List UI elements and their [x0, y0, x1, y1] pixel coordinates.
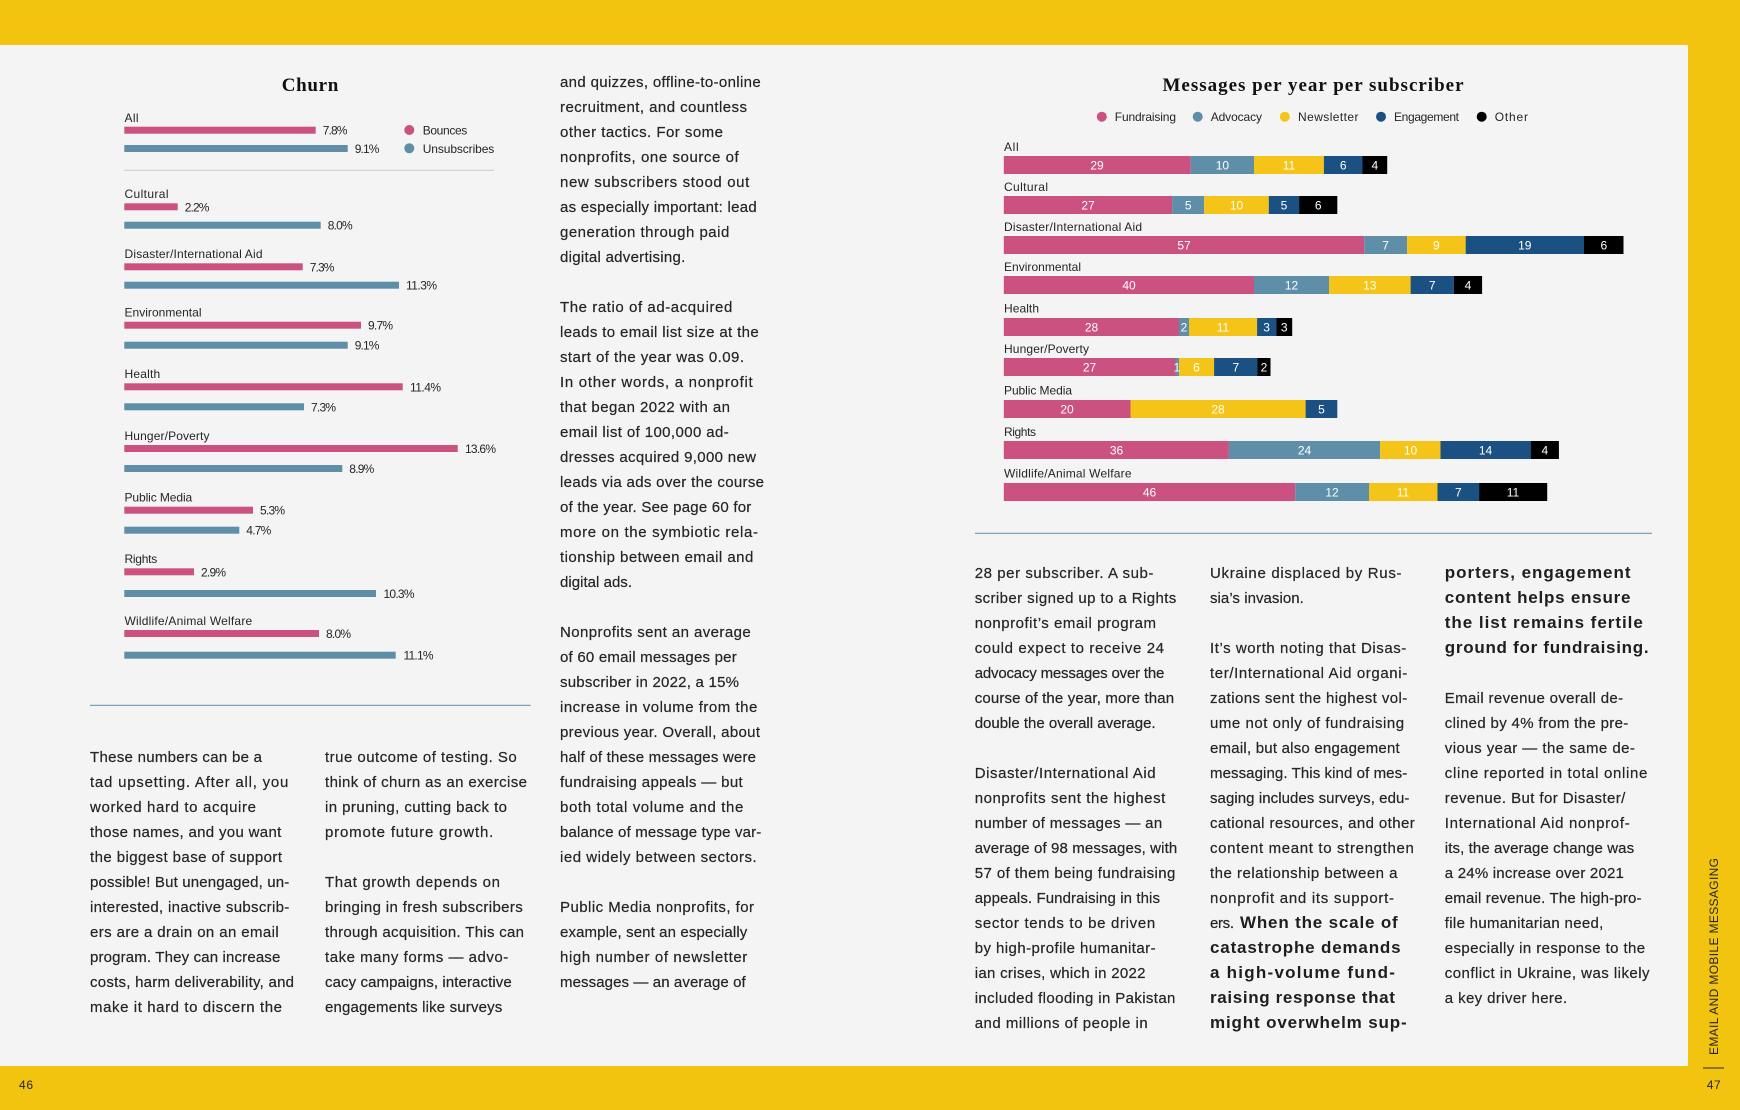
stacked row: Wildlife/Animal Welfare	[1004, 466, 1547, 501]
panel: messages per year stacked bar chart	[1004, 75, 1624, 501]
text block: left column three: subscriber in 2022, a 15%	[560, 674, 739, 691]
text block: left column three: fundraising appeals — but	[560, 774, 744, 791]
text block: right column one: number of messages — an	[975, 815, 1162, 832]
text block: right column one: 57 of them being fundraising	[975, 865, 1175, 882]
churn row: Disaster/International Aid: Disaster/International Aid	[124, 247, 262, 261]
churn legend: Unsubscribes	[423, 142, 494, 156]
bottom yellow band	[0, 1066, 1740, 1110]
churn legend: Bounces	[423, 124, 467, 138]
text block: right column two: ume not only of fundraising	[1210, 715, 1404, 732]
text block: left column one: make it hard to discern the	[90, 999, 282, 1016]
text block: right column three: Email revenue overall de-	[1445, 690, 1623, 707]
text block: left column two: take many forms — advo-	[325, 949, 508, 966]
stacked row: Hunger/Poverty	[1004, 342, 1270, 376]
text block: left column two: That growth depends on	[325, 874, 500, 891]
stacked row: Disaster/International Aid: 7	[1382, 238, 1389, 252]
text block: right column three: especially in response to the	[1445, 940, 1645, 957]
text block: right column two	[1210, 565, 1415, 1032]
stacked row: Public Media: Public Media	[1004, 384, 1072, 398]
text block: left column one: those names, and you want	[90, 824, 282, 841]
stacked row: Cultural: 5	[1185, 198, 1192, 212]
churn row: Cultural: 2.2%	[185, 200, 210, 214]
text block: left column three: example, sent an especially	[560, 924, 748, 941]
stacked row: Wildlife/Animal Welfare: 7	[1455, 486, 1462, 500]
text block: right column three: a 24% increase over 2021	[1445, 865, 1624, 882]
stacked row: Health: 3	[1263, 320, 1270, 334]
stacked row: Cultural: 10	[1230, 198, 1243, 212]
text block: right column three: International Aid nonprof-	[1445, 815, 1630, 832]
stacked row: Environmental	[1004, 260, 1482, 294]
text block: left column one: the biggest base of support	[90, 849, 283, 866]
churn row: Rights: Rights	[124, 552, 157, 566]
text block: right column two: saging includes surveys, edu-	[1210, 790, 1409, 807]
text block: right column three: revenue. But for Disaster/	[1445, 790, 1626, 807]
text block: right column three: email revenue. The high-pro-	[1445, 890, 1642, 907]
text block: left column one: possible! But unengaged, un-	[90, 874, 289, 891]
stacked row: Cultural: 6	[1315, 198, 1322, 212]
text block: right column one: nonprofits sent the highest	[975, 790, 1166, 807]
text block: right column one: sector tends to be driven	[975, 915, 1155, 932]
text block: right column three: conflict in Ukraine, was likely	[1445, 965, 1650, 982]
stacked row: Rights: 10	[1404, 444, 1417, 458]
text block: right column one: and millions of people in	[975, 1015, 1148, 1032]
stacked row: Wildlife/Animal Welfare: Wildlife/Animal Welfare	[1004, 466, 1132, 480]
text block: left column two: engagements like surveys	[325, 999, 502, 1016]
stacked row: Health: 11	[1217, 320, 1230, 334]
churn row: Disaster/International Aid: 11.3%	[406, 279, 437, 293]
text block: right column one: course of the year, more than	[975, 690, 1174, 707]
churn row: Cultural	[124, 187, 353, 233]
churn row: Health	[124, 367, 441, 414]
text block: right column three: its, the average change was	[1445, 840, 1634, 857]
churn row: Health: Health	[124, 367, 160, 381]
text block: left column two: through acquisition. This can	[325, 924, 524, 941]
text block: left column three: balance of message type var-	[560, 824, 761, 841]
text block: left column three: previous year. Overall, about	[560, 724, 761, 741]
text block: right column two: might overwhelm sup-	[1210, 1013, 1407, 1032]
churn row: All	[124, 111, 380, 156]
text block: right column two: When the scale of	[1240, 913, 1398, 932]
stacked row: Rights: Rights	[1004, 425, 1036, 439]
stacked row: All: 4	[1371, 158, 1378, 172]
stacked row: Public Media: 28	[1211, 402, 1225, 416]
text block: right column three: file humanitarian need,	[1445, 915, 1603, 932]
stacked row: Rights: 24	[1298, 444, 1311, 458]
text block: left column two: true outcome of testing. So	[325, 749, 517, 766]
panel: churn chart	[124, 75, 496, 663]
text block: left column three: The ratio of ad-acquired	[560, 299, 732, 316]
text block: left column three: email list of 100,000 ad-	[560, 424, 729, 441]
text block: left column two: in pruning, cutting back to	[325, 799, 507, 816]
churn row: Hunger/Poverty: 8.9%	[349, 462, 375, 476]
text block: left column three: both total volume and the	[560, 799, 743, 816]
text block: right column two: nonprofit and its support-	[1210, 890, 1394, 907]
churn row: All: 7.8%	[323, 124, 348, 138]
text block: left column three: generation through paid	[560, 224, 729, 241]
text block: right column two: a high-volume fund-	[1210, 963, 1395, 982]
text block: left column two: bringing in fresh subscribers	[325, 899, 523, 916]
text block: right column one: 28 per subscriber. A sub-	[975, 565, 1153, 582]
churn row: Wildlife/Animal Welfare: 8.0%	[326, 627, 351, 641]
text block: left column three: as especially important: lead	[560, 199, 757, 216]
stacked row: Disaster/International Aid	[1004, 220, 1624, 254]
text block: left column one: costs, harm deliverability, and	[90, 974, 294, 991]
stacked row: Hunger/Poverty: 6	[1193, 360, 1200, 374]
churn row: Rights: 2.9%	[201, 565, 226, 579]
text block: left column three: recruitment, and countless	[560, 99, 747, 116]
churn row: Wildlife/Animal Welfare	[124, 614, 434, 663]
text block: left column three	[560, 74, 764, 991]
churn row: Environmental: 9.7%	[368, 319, 393, 333]
text block: right column one	[975, 565, 1177, 1032]
messages legend	[1097, 110, 1528, 124]
text block: left column three: dresses acquired 9,000 new	[560, 449, 756, 466]
text block: left column three: and quizzes, offline-to-online	[560, 74, 761, 91]
text block: right column three: ground for fundraising.	[1445, 638, 1649, 657]
stacked row: Disaster/International Aid: 57	[1177, 238, 1191, 252]
stacked row: Hunger/Poverty: 7	[1232, 360, 1239, 374]
text block: right column three	[1445, 563, 1650, 1007]
text block: left column three: of 60 email messages per	[560, 649, 737, 666]
text block: right column two: raising response that	[1210, 988, 1395, 1007]
text block: right column three: cline reported in total online	[1445, 765, 1647, 782]
stacked row: Environmental: 13	[1363, 278, 1377, 292]
text block: left column three: more on the symbiotic rela-	[560, 524, 758, 541]
text block: right column two: It’s worth noting that Disas-	[1210, 640, 1406, 657]
churn row: Environmental: Environmental	[124, 306, 202, 320]
stacked row: Cultural: 27	[1081, 198, 1095, 212]
text block: left column one: program. They can increase	[90, 949, 280, 966]
stacked row: Health: 3	[1281, 320, 1288, 334]
churn row: Rights: 10.3%	[384, 587, 415, 601]
stacked row: All: 11	[1283, 158, 1296, 172]
text block: left column three: ied widely between sectors.	[560, 849, 757, 866]
churn row: Environmental	[124, 306, 393, 353]
churn row: Public Media: 5.3%	[260, 504, 285, 518]
messages legend: Newsletter	[1298, 110, 1358, 124]
churn row: Disaster/International Aid	[124, 247, 437, 293]
stacked row: Health: 2	[1181, 320, 1188, 334]
text block: right column one: could expect to receive 24	[975, 640, 1164, 657]
text block: left column three: tionship between email and	[560, 549, 753, 566]
text block: left column three: increase in volume from the	[560, 699, 757, 716]
top yellow band	[0, 0, 1740, 45]
text block: right column one: nonprofit’s email program	[975, 615, 1156, 632]
stacked row: Cultural: Cultural	[1004, 180, 1048, 194]
stacked row: Environmental: Environmental	[1004, 260, 1081, 274]
stacked row: Health: Health	[1004, 302, 1039, 316]
stacked row: Disaster/International Aid: 6	[1600, 238, 1607, 252]
stacked row: All: 29	[1090, 158, 1104, 172]
churn row: Cultural: 8.0%	[328, 219, 353, 233]
stacked row: Environmental: 4	[1465, 278, 1472, 292]
stacked row: Disaster/International Aid: 19	[1518, 238, 1532, 252]
stacked row: All: 10	[1216, 158, 1229, 172]
text block: left column three: half of these messages were	[560, 749, 756, 766]
right yellow band	[1688, 0, 1740, 1110]
stacked row: Rights: 36	[1110, 444, 1123, 458]
text block: left column three: that began 2022 with an	[560, 399, 730, 416]
vertical section label: EMAIL AND MOBILE MESSAGING	[1707, 858, 1721, 1055]
text block: left column three: digital ads.	[560, 574, 632, 591]
messages legend: Engagement	[1394, 110, 1460, 124]
stacked row: Wildlife/Animal Welfare: 11	[1397, 486, 1410, 500]
stacked row: All	[1004, 140, 1387, 174]
text block: left column three: leads to email list size at the	[560, 324, 759, 341]
churn row: Wildlife/Animal Welfare: Wildlife/Animal Welfare	[124, 614, 253, 628]
stacked row: All: All	[1004, 140, 1019, 154]
page number left: 46	[19, 1078, 33, 1092]
text block: left column three: other tactics. For some	[560, 124, 723, 141]
stacked row: Public Media: 5	[1318, 402, 1325, 416]
text block: left column three: Nonprofits sent an average	[560, 624, 751, 641]
churn row: All: All	[124, 111, 138, 125]
text block: right column one: included flooding in Pakistan	[975, 990, 1175, 1007]
text block: left column one: ers are a drain on an email	[90, 924, 279, 941]
text block: right column one: double the overall average.	[975, 715, 1156, 732]
stacked row: Environmental: 40	[1122, 278, 1136, 292]
messages legend: Fundraising	[1115, 110, 1176, 124]
stacked row: Public Media: 20	[1060, 402, 1074, 416]
text block: right column two: Ukraine displaced by Rus-	[1210, 565, 1402, 582]
text block: right column one: scriber signed up to a Rights	[975, 590, 1176, 607]
text block: left column three: nonprofits, one source of	[560, 149, 740, 166]
churn row: Hunger/Poverty	[124, 429, 496, 476]
churn chart title: Churn	[282, 75, 339, 96]
stacked row: Hunger/Poverty: 27	[1083, 360, 1096, 374]
churn legend	[404, 124, 494, 156]
text block: left column three: start of the year was 0.09.	[560, 349, 744, 366]
stacked row: Health: 28	[1085, 320, 1098, 334]
churn row: All: 9.1%	[355, 142, 380, 156]
text block: left column three: leads via ads over the course	[560, 474, 764, 491]
churn row: Rights	[124, 552, 415, 601]
churn row: Public Media	[124, 490, 285, 538]
text block: left column one: interested, inactive subscrib-	[90, 899, 289, 916]
text block: left column two: think of churn as an exercise	[325, 774, 527, 791]
churn row: Public Media: Public Media	[124, 490, 193, 504]
text block: right column two: content meant to strengthen	[1210, 840, 1414, 857]
text block: left column two	[325, 749, 527, 1016]
text block: left column three: new subscribers stood out	[560, 174, 750, 191]
text block: right column one: appeals. Fundraising in this	[975, 890, 1160, 907]
text block: right column two: ter/International Aid organi-	[1210, 665, 1407, 682]
text block: right column two: zations sent the highest vol-	[1210, 690, 1407, 707]
text block: left column one	[89, 749, 294, 1016]
stacked row: Environmental: 7	[1429, 278, 1436, 292]
stacked row: Disaster/International Aid: Disaster/International Aid	[1004, 220, 1142, 234]
text block: right column one: average of 98 messages, with	[975, 840, 1177, 857]
churn row: Health: 11.4%	[410, 380, 441, 394]
churn row: Public Media: 4.7%	[246, 524, 272, 538]
churn row: Wildlife/Animal Welfare: 11.1%	[404, 649, 434, 663]
stacked row: Environmental: 12	[1285, 278, 1298, 292]
messages legend: Advocacy	[1211, 110, 1262, 124]
text block: left column three: messages — an average of	[560, 974, 747, 991]
text block: left column three: of the year. See page 60 for	[560, 499, 751, 516]
stacked row: Public Media	[1004, 384, 1337, 418]
stacked row: Disaster/International Aid: 9	[1433, 238, 1440, 252]
messages legend: Other	[1495, 110, 1528, 124]
text block: left column two: promote future growth.	[325, 824, 493, 841]
text block: right column one: ian crises, which in 2022	[975, 965, 1146, 982]
text block: right column two: email, but also engagement	[1210, 740, 1401, 757]
text block: right column two: sia’s invasion.	[1210, 590, 1304, 607]
text block: left column one: tad upsetting. After all, you	[90, 774, 288, 791]
stacked row: Cultural	[1004, 180, 1337, 214]
page number right: 47	[1707, 1078, 1721, 1092]
text block: right column one: Disaster/International Aid	[975, 765, 1156, 782]
text block: right column two: the relationship between a	[1210, 865, 1398, 882]
text block: right column two: cational resources, and other	[1210, 815, 1415, 832]
text block: right column three: porters, engagement	[1445, 563, 1631, 582]
text block: left column three: digital advertising.	[560, 249, 685, 266]
churn row: Health: 7.3%	[311, 400, 336, 414]
text block: right column three: clined by 4% from the pre-	[1445, 715, 1628, 732]
text block: left column one: These numbers can be a	[90, 749, 263, 766]
stacked row: Hunger/Poverty: Hunger/Poverty	[1004, 342, 1089, 356]
text block: right column three: the list remains fertile	[1445, 613, 1643, 632]
text block: left column three: Public Media nonprofits, for	[560, 899, 754, 916]
text block: right column three: a key driver here.	[1445, 990, 1567, 1007]
churn row: Environmental: 9.1%	[355, 339, 380, 353]
stacked row: Wildlife/Animal Welfare: 12	[1325, 486, 1339, 500]
stacked row: Rights	[1004, 425, 1559, 459]
stacked row: Hunger/Poverty: 2	[1261, 360, 1268, 374]
text block: right column one: advocacy messages over the	[975, 665, 1164, 682]
text block: left column two: cacy campaigns, interactive	[325, 974, 512, 991]
stacked row: Rights: 14	[1479, 444, 1492, 458]
stacked row: Wildlife/Animal Welfare: 11	[1507, 486, 1520, 500]
text block: left column three: In other words, a nonprofit	[560, 374, 754, 391]
stacked row: Health	[1004, 302, 1292, 336]
churn row: Disaster/International Aid: 7.3%	[310, 260, 335, 274]
text block: left column three: high number of newsletter	[560, 949, 747, 966]
stacked row: Wildlife/Animal Welfare: 46	[1143, 486, 1156, 500]
text block: right column two: messaging. This kind of mes-	[1210, 765, 1407, 782]
text block: right column one: by high-profile humanitar-	[975, 940, 1156, 957]
text block: right column three: vious year — the same de-	[1445, 740, 1635, 757]
churn row: Hunger/Poverty: 13.6%	[465, 442, 496, 456]
stacked row: All: 6	[1340, 158, 1347, 172]
stacked row: Rights: 4	[1541, 444, 1548, 458]
messages chart title: Messages per year per subscriber	[1162, 75, 1464, 96]
churn row: Hunger/Poverty: Hunger/Poverty	[124, 429, 210, 443]
text block: right column two: catastrophe demands	[1210, 938, 1401, 957]
text block: right column two: ers.	[1210, 915, 1234, 932]
stacked row: Cultural: 5	[1281, 198, 1288, 212]
stacked row: Hunger/Poverty: 1	[1174, 360, 1181, 374]
text block: left column one: worked hard to acquire	[89, 799, 256, 816]
text block: right column three: content helps ensure	[1445, 588, 1630, 607]
churn row: Cultural: Cultural	[124, 187, 168, 201]
